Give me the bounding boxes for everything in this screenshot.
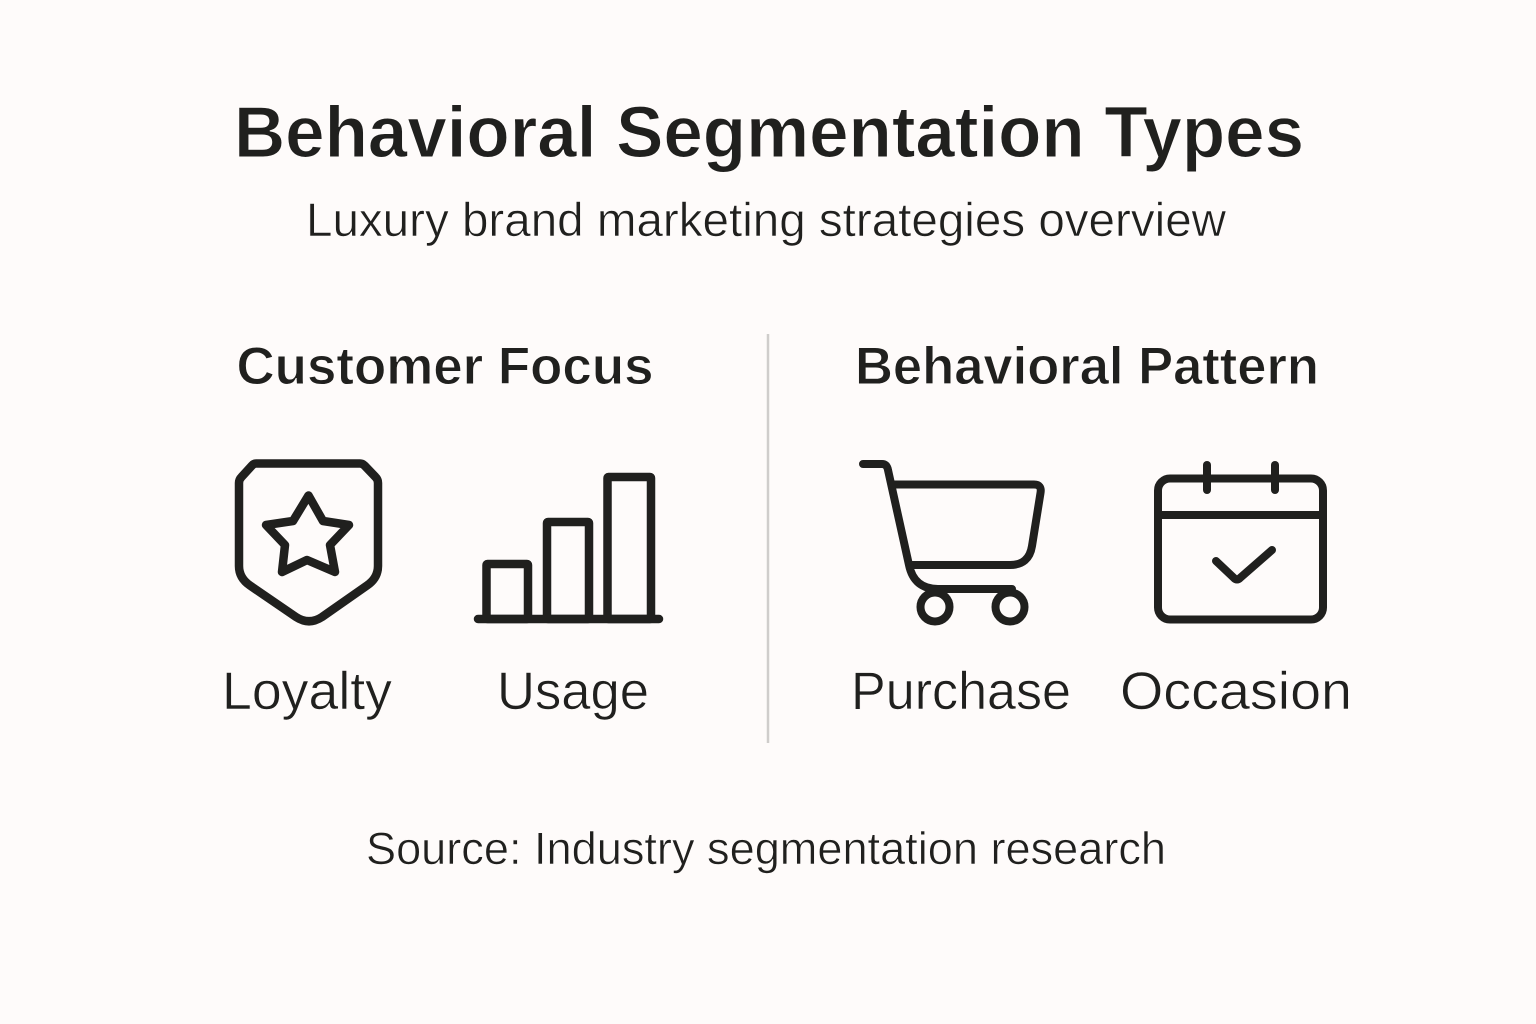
- heading: behavioral pattern: Behavioral Pattern: [855, 337, 1319, 396]
- label: usage: Usage: [497, 662, 649, 721]
- label: occasion: Occasion: [1120, 662, 1352, 721]
- icon: loyalty shield with star: [239, 464, 378, 621]
- icon: calendar with check: [1158, 465, 1323, 620]
- label: loyalty: Loyalty: [222, 662, 392, 721]
- panel: behavioral pattern: [851, 337, 1352, 721]
- icon: shopping cart: [863, 464, 1041, 622]
- panel: customer focus: [222, 337, 659, 721]
- heading: customer focus: Customer Focus: [236, 337, 654, 396]
- label: purchase: Purchase: [851, 662, 1071, 721]
- title: Behavioral Segmentation Types: [234, 93, 1304, 173]
- subtitle: Luxury brand marketing strategies overview: [306, 193, 1227, 246]
- icon: usage bar chart: [478, 477, 659, 619]
- source note: Source: Industry segmentation research: [366, 823, 1166, 874]
